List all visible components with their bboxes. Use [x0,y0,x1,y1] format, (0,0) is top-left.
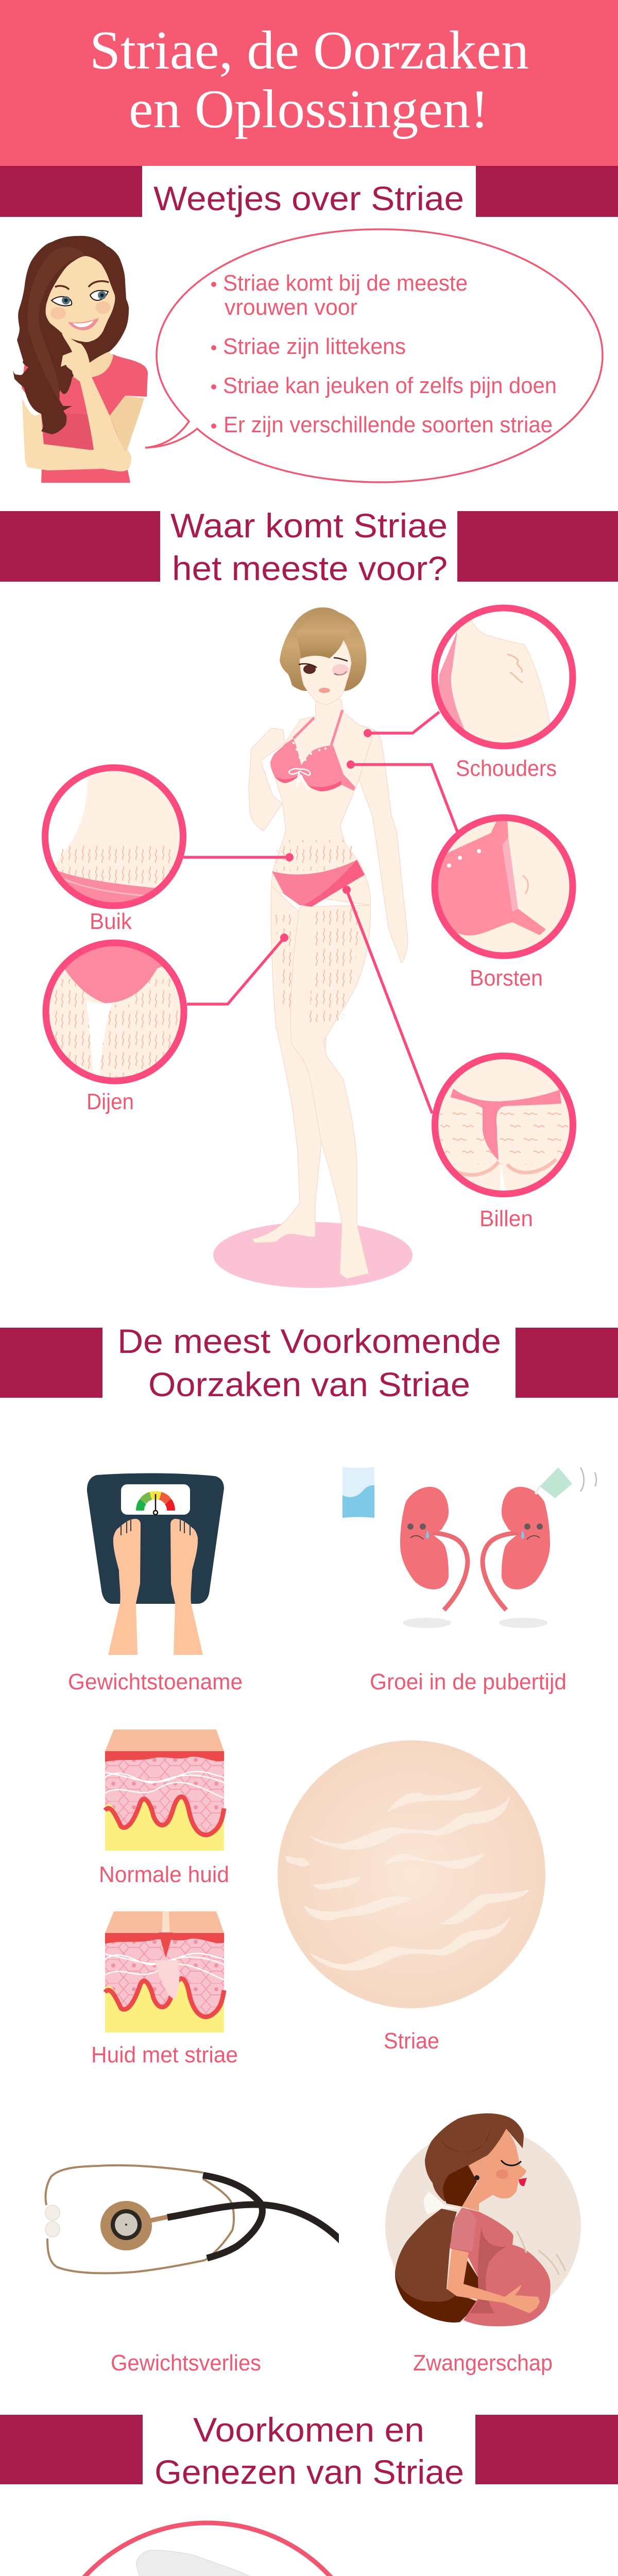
heading: De meest Voorkomende Oorzaken van Striae [0,1322,618,1403]
fact list: Er zijn verschillende soorten striae [224,412,553,437]
base ellipse under figure [213,1222,413,1288]
connector lines and dots [183,712,457,1113]
heading: Waar komt Striae het meeste voor [0,506,618,587]
bikini bottom [272,860,365,907]
cheeks and mouth [50,307,66,319]
legs [252,886,330,1243]
head hair [425,2113,524,2201]
icon: ear buds [45,2205,60,2221]
callout: Billen: Billen [479,1206,533,1231]
icon: stethoscope ear tubes [45,2165,234,2273]
bikini straps [294,710,342,745]
stretch mark streaks [286,1786,530,1971]
callout: Billen [435,1056,573,1231]
icon: black tubing [203,2175,262,2258]
icon: sad kidney left [400,1487,468,1628]
cause: Huid met striae (skin diagram): Huid met striae [91,2042,238,2067]
diagram: Behandelingen [30,2523,602,2576]
cause: Huid met striae (skin diagram) [91,1911,238,2067]
illustration: thinking woman [13,236,148,483]
title: Striae, de Oorzaken [90,20,529,80]
fact list: Striae kan jeuken of zelfs pijn doen [223,373,557,398]
face [46,256,115,342]
cause: Gewichtsverlies (stethoscope): Gewichtsverlies [111,2350,261,2376]
heading: Weetjes over Striae: Weetjes over Striae [153,179,464,217]
cause: Gewichtsverlies (stethoscope) [45,2165,344,2376]
bubble outline [145,229,603,482]
cause: Groei in de pubertijd (kidneys): Groei in de pubertijd [370,1669,566,1694]
fact list: Striae zijn littekens [223,334,406,359]
cause: Normale huid (skin diagram) [99,1730,229,1887]
face and neck [462,2129,526,2211]
cause: Striae (skin close-up) [278,1740,545,2054]
icon: chest piece [150,2217,167,2221]
upper arm and forearm across body [22,390,131,471]
callout: Buik [45,768,183,934]
hair back [280,607,367,691]
callout: Borsten: Borsten [470,965,543,991]
heading: Weetjes over Striae [0,166,618,217]
icon: sad kidney right [483,1487,550,1628]
icon: glass of water [342,1467,374,1518]
icon: label tag [536,1467,596,1498]
icon: laser handpiece [109,2550,346,2576]
fringe [296,611,355,658]
hair tie [424,2191,458,2214]
fact list [211,270,557,437]
raised forearm and hand [61,333,126,465]
speech bubble with facts [145,229,603,482]
illustration: woman in bikini [249,607,408,1279]
ponytail [395,2209,477,2323]
callout: Dijen: Dijen [87,1089,134,1114]
heading: Voorkomen en Genezen van Striae: Voorkomen en [193,2411,424,2449]
eyes and lips [303,665,316,674]
icon: bathroom scale [87,1473,224,1604]
fact list: vrouwen voor [225,295,357,320]
shirt [22,354,148,483]
under hair [443,2165,477,2207]
hair [13,236,129,434]
callout: Schouders: Schouders [456,756,557,781]
title: en Oplossingen! [129,79,489,139]
heading: Voorkomen en Genezen van Striae [0,2411,618,2491]
callout: Dijen [46,938,184,1114]
torso [271,699,374,905]
icon: feet [108,1519,203,1655]
stretch marks on body [276,840,358,871]
cause: Normale huid (skin diagram): Normale huid [99,1862,229,1887]
cause: Gewichtstoename (scale): Gewichtstoename [68,1669,243,1694]
heading: De meest Voorkomende Oorzaken van Striae: Oorzaken van Striae [148,1365,470,1403]
eyes [52,281,109,306]
motion lines [517,2231,565,2275]
dress [450,2208,551,2326]
bikini dots and bow [289,742,327,789]
fact list: Striae komt bij de meeste [223,270,468,296]
heading: Waar komt Striae het meeste voor: het meeste voor? [172,549,448,587]
cause: Zwangerschap (pregnant woman) [385,2113,581,2376]
cause: Striae (skin close-up): Striae [384,2028,439,2054]
header banner [0,0,618,166]
callout: Schouders [435,608,573,781]
cause: Groei in de pubertijd (kidneys) [342,1467,596,1694]
cause: Zwangerschap (pregnant woman): Zwangerschap [413,2350,553,2376]
big circle [40,2523,375,2576]
heading: Waar komt Striae het meeste voor: Waar komt Striae [170,506,448,545]
face [300,639,351,704]
eye, cheek, lips, earring [501,2160,521,2165]
cause: Gewichtstoename (scale) [68,1473,243,1694]
neck [72,337,113,378]
arms [249,728,285,831]
title [90,20,529,139]
callout: Borsten [433,818,573,991]
callout: Buik: Buik [90,909,132,934]
heading: Voorkomen en Genezen van Striae: Genezen van Striae [154,2453,464,2491]
arm [447,2249,540,2313]
heading: De meest Voorkomende Oorzaken van Striae: De meest Voorkomende [117,1322,501,1360]
bikini top [270,738,355,791]
